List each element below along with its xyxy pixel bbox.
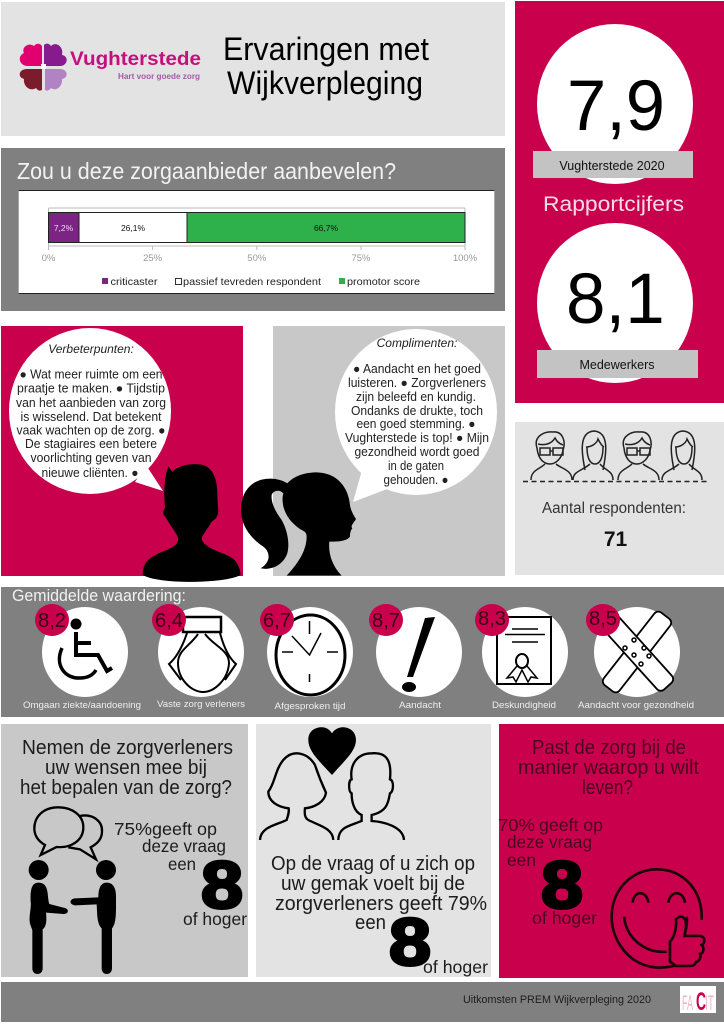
item: vaste zorgverleners [152, 604, 245, 710]
circle: score Vughterstede: 7,9 [567, 67, 665, 146]
logo: FACIT [680, 986, 716, 1016]
heading: wensen: het bepalen van de zorg? [20, 777, 232, 799]
item: vaste zorgverleners: 6,4 [155, 610, 183, 632]
icon: nurse [169, 617, 236, 692]
bar chart [18, 190, 494, 294]
legend: promotor score [347, 276, 420, 288]
title: Ervaringen met [223, 31, 429, 67]
speech bubble: verbeterpunten: praatje te maken. ● Tijdstip [17, 382, 165, 396]
speech bubble: complimenten: in de gaten [388, 459, 444, 473]
panel: wensen [1, 724, 248, 977]
item: aandacht: 8,7 [372, 610, 400, 632]
footer text: Uitkomsten PREM Wijkverpleging 2020 [463, 994, 651, 1006]
heading: past de zorg [518, 737, 699, 799]
heading: past de zorg: Past de zorg bij de [532, 737, 686, 759]
text: 70 procent: deze vraag [507, 832, 592, 852]
text: 70 procent: 8 [541, 848, 583, 923]
text: 70 procent: of hoger [532, 908, 597, 928]
heading: aanbevelen: Zou u deze zorgaanbieder aanbevelen? [17, 158, 396, 184]
title [223, 31, 429, 101]
item: aandacht voor gezondheid: 8,5 [589, 608, 617, 630]
text: 75 procent: geeft op [152, 819, 217, 839]
circle: score medewerkers [537, 223, 698, 383]
panel: rapportcijfers [515, 1, 724, 403]
circle: score Vughterstede [533, 24, 693, 184]
text: 70 procent: 70% [498, 815, 535, 835]
item: omgaan ziekte: 8,2 [38, 610, 66, 632]
speech bubble: complimenten: een goed stemming. ● [356, 417, 476, 431]
item: vaste zorgverleners: Vaste zorg verleners [157, 699, 245, 710]
item: afgesproken tijd: Afgesproken tijd [274, 701, 346, 712]
legend [102, 276, 420, 288]
heading: wensen: uw wensen mee bij [45, 757, 207, 779]
icon: four people [523, 431, 707, 482]
heading: wensen [20, 737, 233, 799]
icon: diploma [497, 617, 551, 684]
circle: score medewerkers: Medewerkers [579, 358, 655, 372]
bar chart: 25% [143, 253, 163, 264]
speech bubble: complimenten: Vughterstede is top! ● Mijn [345, 431, 489, 445]
panel: past de zorg [498, 724, 724, 978]
icon: exclamation mark [402, 617, 435, 692]
item: afgesproken tijd [260, 604, 353, 712]
icon: two people talking [29, 807, 116, 974]
speech bubble: verbeterpunten: voorlichting geven van [30, 451, 152, 465]
legend: passief tevreden respondent [183, 276, 321, 288]
silhouette: woman [241, 472, 356, 576]
logo: Vughterstede [20, 44, 201, 91]
heading: rapportcijfers: Rapportcijfers [543, 192, 684, 216]
text: 79 procent [271, 853, 488, 980]
text: 79 procent: of hoger [423, 957, 488, 977]
icon: smiley with thumb up [612, 869, 704, 968]
bar chart: 75% [351, 253, 371, 264]
text: 75 procent: 8 [201, 848, 243, 923]
speech bubble: verbeterpunten: van het aanbieden van zorg [16, 396, 166, 410]
heading: wensen: Nemen de zorgverleners [22, 737, 233, 759]
icon: wheelchair [59, 618, 112, 678]
panel: gemak [256, 724, 491, 980]
speech bubble: verbeterpunten: nieuwe cliënten. ● [42, 466, 138, 480]
heading: gemiddelde waardering: Gemiddelde waardering: [12, 587, 186, 605]
text: 70 procent: een [507, 850, 536, 870]
speech bubble: complimenten: gehouden. ● [384, 473, 448, 487]
logo: FACIT: IT [705, 992, 714, 1015]
speech bubble: complimenten: gezondheid wordt goed [354, 445, 480, 459]
item: deskundigheid [475, 604, 568, 711]
speech bubble: verbeterpunten [9, 328, 171, 494]
bar chart: 7,2% [54, 223, 74, 233]
item: deskundigheid: 8,3 [478, 608, 506, 630]
text: 75 procent: een [168, 854, 196, 874]
bar chart: 50% [247, 253, 267, 264]
bar chart: 26,1% [121, 223, 145, 233]
text: 79 procent: zorgverleners geeft 79% [275, 893, 487, 915]
text: 75 procent: of hoger [183, 909, 247, 929]
circle: score medewerkers: 8,1 [566, 260, 665, 339]
item: deskundigheid: Deskundigheid [492, 700, 556, 711]
text: 79 procent: Op de vraag of u zich op [271, 853, 475, 875]
panel: gemiddelde waardering [1, 587, 724, 717]
speech bubble: verbeterpunten: Verbeterpunten: [48, 342, 134, 356]
circle: score Vughterstede: Vughterstede 2020 [559, 159, 665, 173]
text: 79 procent: 8 [389, 905, 431, 980]
text: 79 procent: uw gemak voelt bij de [281, 873, 465, 895]
silhouette: man [143, 464, 241, 582]
text: 75 procent [114, 819, 247, 929]
speech bubble: verbeterpunten: is wisselend. Dat betekent [20, 410, 162, 424]
item: afgesproken tijd: 6,7 [263, 610, 291, 632]
panel: aanbevelen [1, 148, 505, 311]
speech bubble: complimenten: Complimenten: [377, 336, 457, 350]
bar chart: 100% [453, 253, 478, 264]
speech bubble: verbeterpunten: ● Wat meer ruimte om een [20, 368, 163, 382]
label: aantal respondenten: Aantal respondenten: [542, 500, 686, 517]
speech bubble: complimenten: ● Aandacht en het goed [353, 362, 481, 376]
logo: Vughterstede: Vughterstede [70, 49, 201, 70]
text: 75 procent: 75% [114, 819, 152, 839]
panel: respondenten [515, 422, 724, 575]
speech bubble: complimenten: Ondanks de drukte, toch [351, 404, 483, 418]
text: 79 procent: een [355, 912, 386, 934]
footer [1, 982, 724, 1022]
icon: clock [276, 615, 345, 695]
bar chart: 0% [42, 253, 56, 264]
speech bubble: complimenten [335, 329, 497, 502]
item: omgaan ziekte: Omgaan ziekte/aandoening [23, 700, 141, 711]
text: 75 procent: deze vraag [142, 836, 226, 856]
title: Wijkverpleging [227, 65, 423, 101]
speech bubble: verbeterpunten: De stagiaires een betere [25, 437, 157, 451]
item: omgaan ziekte [23, 604, 141, 711]
panel: complimenten [273, 326, 505, 576]
icon: plaster [599, 610, 675, 694]
bar chart: 66,7% [314, 223, 338, 233]
logo: FACIT: C [696, 988, 706, 1016]
speech bubble: verbeterpunten: vaak wachten op de zorg. ● [16, 424, 166, 438]
logo: Vughterstede: Hart voor goede zorg [118, 72, 200, 81]
panel: header [1, 2, 505, 136]
speech bubble: complimenten: luisteren. ● Zorgverleners [348, 376, 486, 390]
icon: couple with heart [260, 727, 404, 840]
heading: past de zorg: manier waarop u wilt [518, 757, 699, 779]
text: 70 procent: geeft op [539, 815, 603, 835]
logo: FACIT: FA [682, 992, 693, 1015]
text: 70 procent [498, 815, 603, 928]
number: 71: 71 [604, 528, 627, 551]
item: aandacht: Aandacht [399, 700, 441, 711]
speech bubble: complimenten: zijn beleefd en kundig. [356, 390, 476, 404]
item: aandacht voor gezondheid: Aandacht voor gezondheid [578, 700, 694, 711]
legend: criticaster [110, 276, 158, 288]
item: aandacht voor gezondheid [578, 604, 694, 711]
item: aandacht [369, 604, 462, 711]
heading: past de zorg: leven? [582, 777, 633, 799]
panel: verbeterpunten [1, 326, 243, 582]
